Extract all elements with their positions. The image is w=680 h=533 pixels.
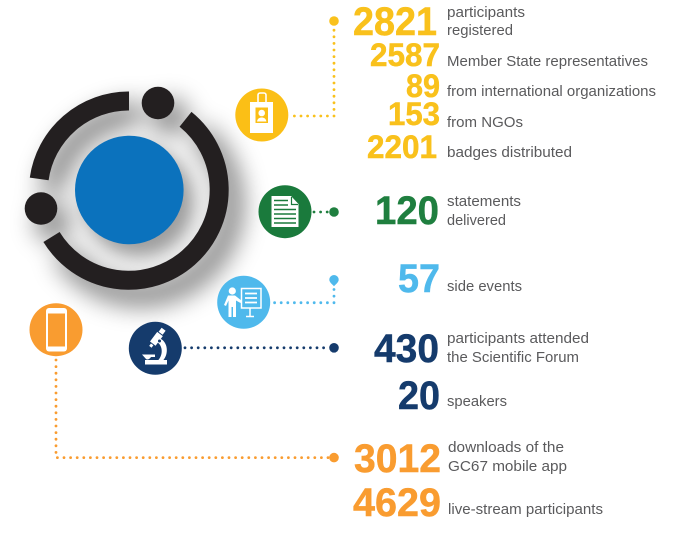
stat: 2821 participants registered bbox=[353, 0, 525, 44]
ring arc right and bottom bbox=[52, 119, 219, 280]
stat: 430 participants attended the Scientific Forum: the Scientific Forum bbox=[447, 350, 579, 366]
stat: 2201 badges distributed bbox=[367, 129, 572, 165]
stat: 57 side events bbox=[398, 257, 522, 301]
icon: ID badge bbox=[235, 88, 288, 142]
stat: 430 participants attended the Scientific Forum: participants attended bbox=[447, 331, 589, 347]
stat: 4629 live-stream participants: 4629 bbox=[353, 481, 441, 525]
icon: presenter at board bbox=[217, 276, 270, 329]
stat: 2821 participants registered: 2821 bbox=[353, 0, 437, 44]
stat: 20 speakers bbox=[398, 374, 507, 418]
stat: 2201 badges distributed: badges distributed bbox=[447, 145, 572, 161]
stat: 2821 participants registered: registered bbox=[447, 23, 513, 39]
left satellite dot bbox=[25, 192, 57, 225]
stat: 153 from NGOs: from NGOs bbox=[447, 115, 523, 131]
stat: 89 from international organizations bbox=[406, 68, 656, 104]
central logo: ring, satellites and blue disc bbox=[25, 87, 231, 294]
stat: 120 statements delivered: 120 bbox=[375, 189, 439, 233]
icon: document bbox=[258, 185, 312, 238]
green dotted connector bbox=[314, 207, 339, 217]
stat: 3012 downloads of the GC67 mobile app bbox=[354, 437, 567, 481]
stat: 20 speakers: speakers bbox=[447, 394, 507, 410]
ring arc upper left bbox=[39, 101, 129, 179]
stat: 57 side events: 57 bbox=[398, 257, 440, 301]
stat: 120 statements delivered: statements bbox=[447, 194, 521, 210]
icon: smartphone bbox=[30, 303, 82, 356]
yellow dotted connector bbox=[291, 16, 339, 116]
stat: 3012 downloads of the GC67 mobile app: GC67 mobile app bbox=[448, 459, 567, 475]
top satellite dot bbox=[142, 87, 174, 119]
stat: 89 from international organizations: 89 bbox=[406, 68, 440, 104]
stat: 3012 downloads of the GC67 mobile app: downloads of the bbox=[448, 440, 564, 456]
stat: 4629 live-stream participants: live-stream participants bbox=[448, 502, 603, 518]
stat: 4629 live-stream participants bbox=[353, 481, 603, 525]
stat: 430 participants attended the Scientific Forum: 430 bbox=[374, 327, 439, 371]
light blue dotted connector bbox=[272, 275, 339, 303]
stat: 3012 downloads of the GC67 mobile app: 3012 bbox=[354, 437, 441, 481]
stat: 2201 badges distributed: 2201 bbox=[367, 129, 437, 165]
stat: 120 statements delivered bbox=[375, 189, 521, 233]
stat: 57 side events: side events bbox=[447, 279, 522, 295]
stat: 2587 Member State representatives bbox=[370, 37, 648, 73]
navy dotted connector bbox=[185, 343, 339, 353]
stat: 2587 Member State representatives: 2587 bbox=[370, 37, 440, 73]
stat: 120 statements delivered: delivered bbox=[447, 213, 506, 229]
stat: 2821 participants registered: participants bbox=[447, 5, 525, 21]
stat: 430 participants attended the Scientific Forum bbox=[374, 327, 589, 371]
icon: microscope bbox=[129, 322, 182, 375]
stat: 2587 Member State representatives: Member State representatives bbox=[447, 54, 648, 70]
stat: 153 from NGOs bbox=[388, 96, 523, 132]
stat: 89 from international organizations: from international organizations bbox=[447, 84, 656, 100]
blue disc bbox=[75, 136, 184, 244]
stat: 153 from NGOs: 153 bbox=[388, 96, 440, 132]
orange dotted connector bbox=[56, 360, 339, 462]
stat: 20 speakers: 20 bbox=[398, 374, 440, 418]
